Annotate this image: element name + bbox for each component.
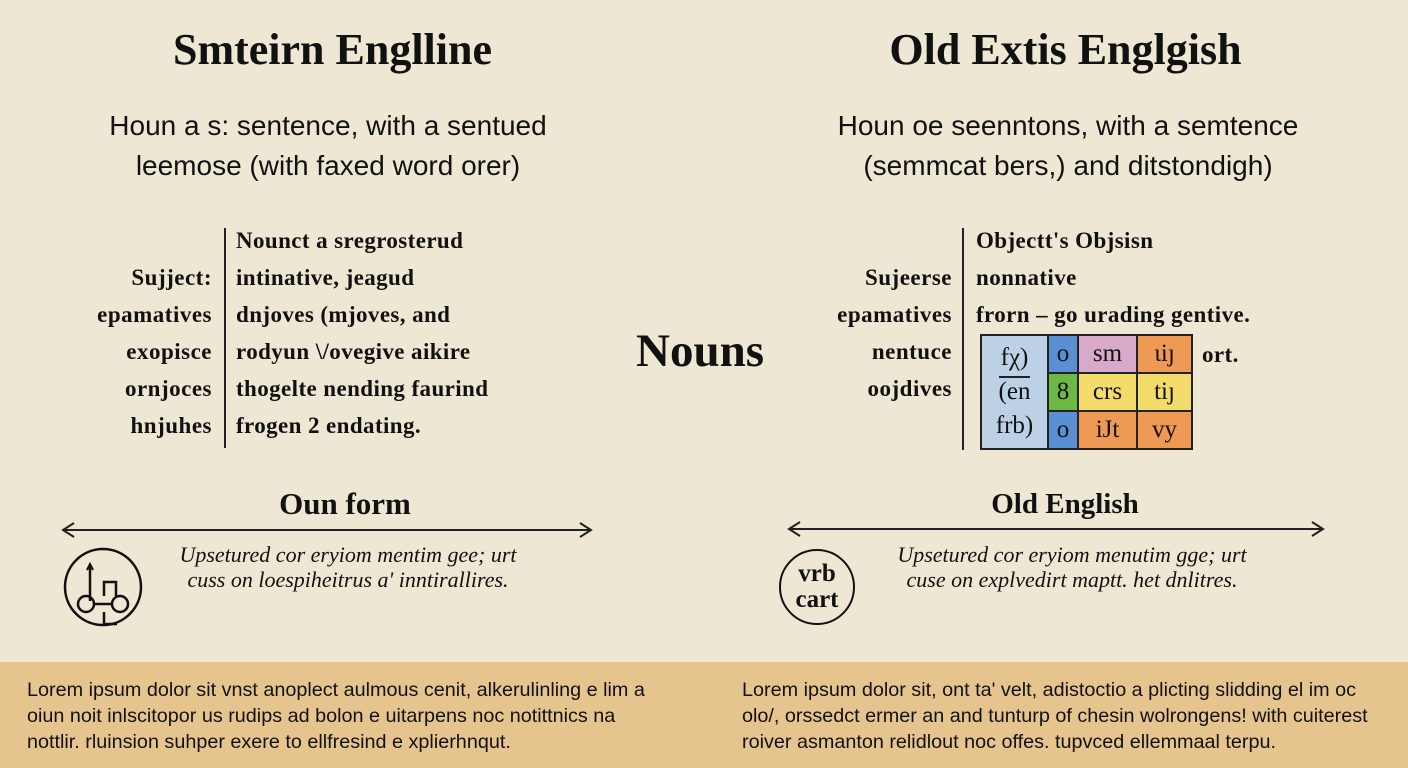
left table [97, 228, 488, 448]
left labels: ornjoces [125, 376, 212, 401]
left values: thogelte nending faurind [236, 376, 488, 401]
right labels: nentuce [872, 339, 952, 364]
title: left: Smteirn Englline [173, 25, 492, 74]
right labels: oojdives [868, 376, 952, 401]
text: left caption [179, 542, 517, 592]
color grid: vy [1152, 416, 1177, 443]
icon: vrb cart [779, 549, 855, 625]
left values: intinative, jeagud [236, 265, 414, 290]
color grid: sm [1093, 340, 1122, 367]
color grid: ιiȷ [1154, 340, 1175, 367]
footer text: right [742, 679, 1368, 753]
arrow: left [61, 522, 593, 538]
text: left caption: cuss on loespiheitrus a' inntirallires. [187, 567, 509, 592]
subtitle: left [109, 110, 547, 181]
footer text: left [27, 679, 645, 753]
left labels: hnjuhes [131, 413, 212, 438]
footer text: left: oiun noit inlscitopor us rudips ad bolon e uitarpens noc notittnics na [27, 705, 615, 727]
right labels: Sujeerse [865, 265, 952, 290]
color grid [980, 334, 1193, 450]
text: right caption: cuse on explvedirt maptt. het dnlitres. [907, 567, 1237, 592]
color grid: o [1057, 340, 1069, 367]
left labels: exopisce [126, 339, 212, 364]
section heading: left: Oun form [279, 486, 411, 521]
footer text: left: Lorem ipsum dolor sit vnst anoplect aulmous cenit, alkerulinling e lim a [27, 679, 645, 701]
left values: rodyun \/ovegive aikire [236, 339, 471, 364]
left values [236, 228, 488, 438]
right values: frorn – go urading gentive. [976, 302, 1250, 327]
right values: Objectt's Objsisn [976, 228, 1153, 253]
text: left caption: Upsetured cor eryiom mentim gee; urt [179, 542, 517, 567]
left labels: epamatives [97, 302, 212, 327]
color grid: tiȷ [1154, 378, 1175, 405]
left values: frogen 2 endating. [236, 413, 421, 438]
right labels: epamatives [837, 302, 952, 327]
icon: vrb cart: vrb [798, 560, 836, 587]
arrow: right [787, 521, 1325, 537]
footer text: right: Lorem ipsum dolor sit, ont ta' velt, adistoctio a plicting slidding el im oc [742, 679, 1356, 701]
color grid: (en [999, 378, 1030, 405]
text: right caption [897, 542, 1247, 592]
right labels [837, 265, 952, 401]
footer band [0, 662, 1408, 768]
color grid: crs [1093, 378, 1122, 405]
subtitle: right: (semmcat bers,) and ditstondigh) [863, 150, 1273, 181]
color grid: o [1057, 416, 1069, 443]
subtitle: left: Houn a s: sentence, with a sentued [109, 110, 547, 141]
left labels [97, 265, 212, 438]
color grid: 8 [1057, 378, 1069, 405]
right values [976, 228, 1250, 327]
left labels: Sujject: [131, 265, 212, 290]
left values: Nounct a sregrosterud [236, 228, 463, 253]
color grid: fχ) [1001, 344, 1028, 371]
left values: dnjoves (mjoves, and [236, 302, 450, 327]
section heading: right: Old English [991, 488, 1139, 520]
icon: vrb cart: cart [795, 586, 839, 613]
title: right: Old Extis Englgish [889, 25, 1242, 74]
footer text: right: olo/, orssedct ermer an and tunturp of chesin wolrongens! with cuiterest [742, 705, 1368, 727]
color grid: iJt [1096, 416, 1119, 443]
right table: ort. [1202, 342, 1239, 367]
subtitle: right: Houn oe seenntons, with a semtence [838, 110, 1298, 141]
icon: circuit circle [64, 548, 142, 626]
right values: nonnative [976, 265, 1077, 290]
subtitle: left: leemose (with faxed word orer) [136, 150, 520, 181]
center heading: Nouns [636, 325, 764, 377]
subtitle: right [838, 110, 1298, 181]
right table [837, 228, 1250, 450]
text: right caption: Upsetured cor eryiom menutim gge; urt [897, 542, 1247, 567]
color grid: frb) [996, 412, 1033, 439]
footer text: left: nottlir. rluinsion suhper exere to ellfresind e xplierhnqut. [27, 731, 511, 753]
footer text: right: roiver asmanton relidlout noc offes. tupvced ellemmaal terpu. [742, 731, 1276, 753]
